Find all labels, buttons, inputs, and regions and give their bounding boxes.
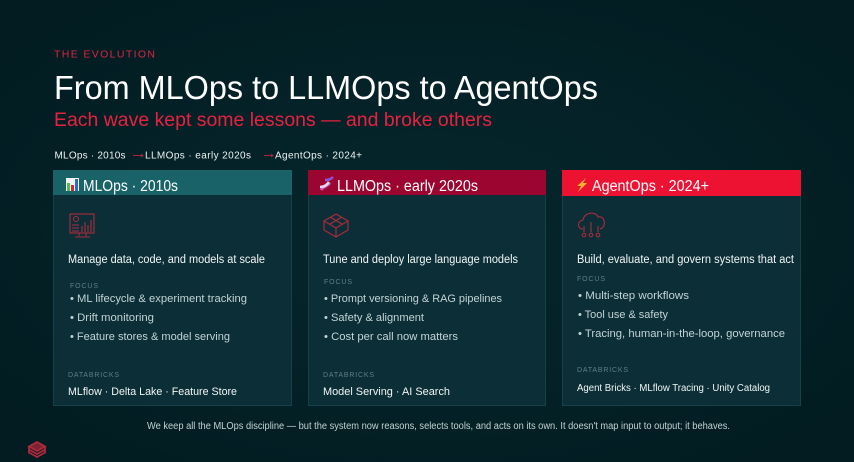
databricks tools: MLflow · Delta Lake · Feature Store [68, 386, 237, 398]
focus list [578, 290, 785, 340]
icon: lightning bolt [577, 178, 587, 192]
heading: AgentOps 2024+: AgentOps · 2024+ [592, 178, 709, 195]
subtitle: Each wave kept some lessons — and broke others [54, 110, 492, 131]
panel: AgentOps [562, 170, 801, 406]
databricks tools: Model Serving · AI Search [323, 386, 450, 398]
focus list: • Prompt versioning & RAG pipelines [324, 293, 502, 305]
focus label: FOCUS [324, 279, 352, 286]
focus list: • Multi-step workflows [578, 290, 690, 302]
timeline: AgentOps · 2024+ [275, 150, 362, 162]
focus list: • ML lifecycle & experiment tracking [70, 293, 247, 305]
icon: cloud network [578, 213, 604, 237]
heading: MLOps 2010s: MLOps · 2010s [83, 178, 178, 195]
databricks label: DATABRICKS [577, 367, 628, 374]
icon: monitor with charts [70, 214, 94, 237]
timeline: LLMOps · early 2020s [145, 150, 251, 162]
icon: dna emoji [320, 177, 333, 190]
icon: open box [324, 214, 348, 237]
card description: Tune and deploy large language models [323, 254, 518, 266]
panel: LLMOps [308, 170, 546, 406]
panel: MLOps [53, 170, 292, 406]
timeline: MLOps · 2010s [54, 150, 126, 162]
icon: bar chart emoji [66, 178, 79, 191]
focus list [324, 293, 502, 343]
timeline [54, 150, 362, 162]
focus list: • Tracing, human-in-the-loop, governance [578, 328, 785, 340]
focus list: • Cost per call now matters [324, 331, 459, 343]
focus list: • Drift monitoring [70, 312, 154, 324]
focus list: • Safety & alignment [324, 312, 424, 324]
focus label: FOCUS [577, 276, 605, 283]
card description: Build, evaluate, and govern systems that act [577, 254, 795, 266]
focus list [70, 293, 247, 343]
card description: Manage data, code, and models at scale [68, 254, 265, 266]
databricks tools: Agent Bricks · MLflow Tracing · Unity Catalog [577, 383, 770, 394]
heading: LLMOps early 2020s: LLMOps · early 2020s [337, 178, 478, 195]
logo: stacked layers [29, 442, 45, 457]
title: From MLOps to LLMOps to AgentOps [54, 69, 598, 106]
focus list: • Tool use & safety [578, 309, 668, 321]
databricks label: DATABRICKS [68, 372, 119, 379]
eyebrow: the evolution: THE EVOLUTION [54, 48, 155, 60]
footer note: We keep all the MLOps discipline — but the system now reasons, selects tools, and acts on its own. It doesn't map input to output; it behaves. [147, 421, 730, 432]
databricks label: DATABRICKS [323, 372, 374, 379]
focus list: • Feature stores & model serving [70, 331, 230, 343]
focus label: FOCUS [70, 283, 98, 290]
